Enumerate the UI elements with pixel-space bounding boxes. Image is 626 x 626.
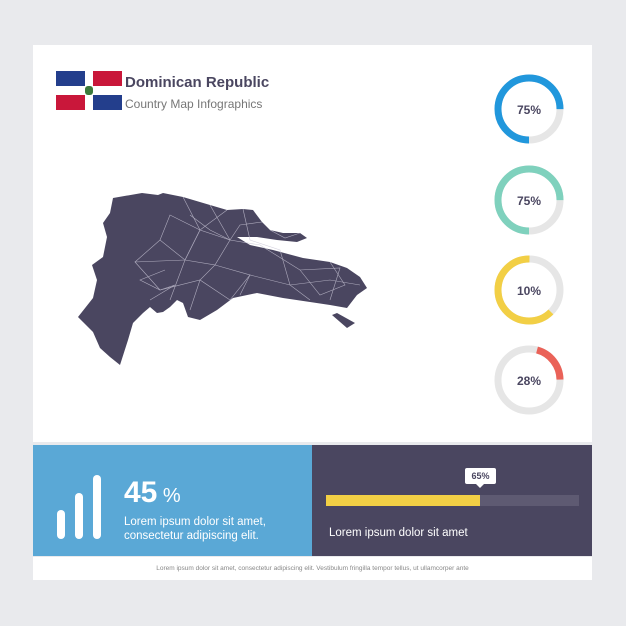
donut charts: 10%: [517, 284, 541, 298]
stat: 45 %: [124, 476, 181, 509]
subtitle: Country Map Infographics: [125, 97, 262, 111]
title: Dominican Republic: [125, 74, 269, 91]
panel: progress: Lorem ipsum dolor sit amet: [329, 527, 468, 539]
donut charts: 28%: [517, 374, 541, 388]
panel: blue stat: [33, 445, 312, 556]
callout: 65%: [471, 471, 490, 481]
donut charts: 75%: [517, 103, 541, 117]
panel: blue stat: Lorem ipsum dolor sit amet,: [124, 516, 266, 528]
icon: bars: [57, 475, 101, 539]
card: [33, 45, 592, 442]
callout: [465, 468, 496, 484]
footer: [33, 557, 592, 580]
flag: [56, 71, 122, 110]
footer: Lorem ipsum dolor sit amet, consectetur adipiscing elit. Vestibulum fringilla tempor tellus, ut ullamcorper ante: [156, 565, 469, 572]
panel: progress: [312, 445, 592, 556]
panel: blue stat: consectetur adipiscing elit.: [124, 530, 259, 542]
donut charts: 75%: [517, 194, 541, 208]
